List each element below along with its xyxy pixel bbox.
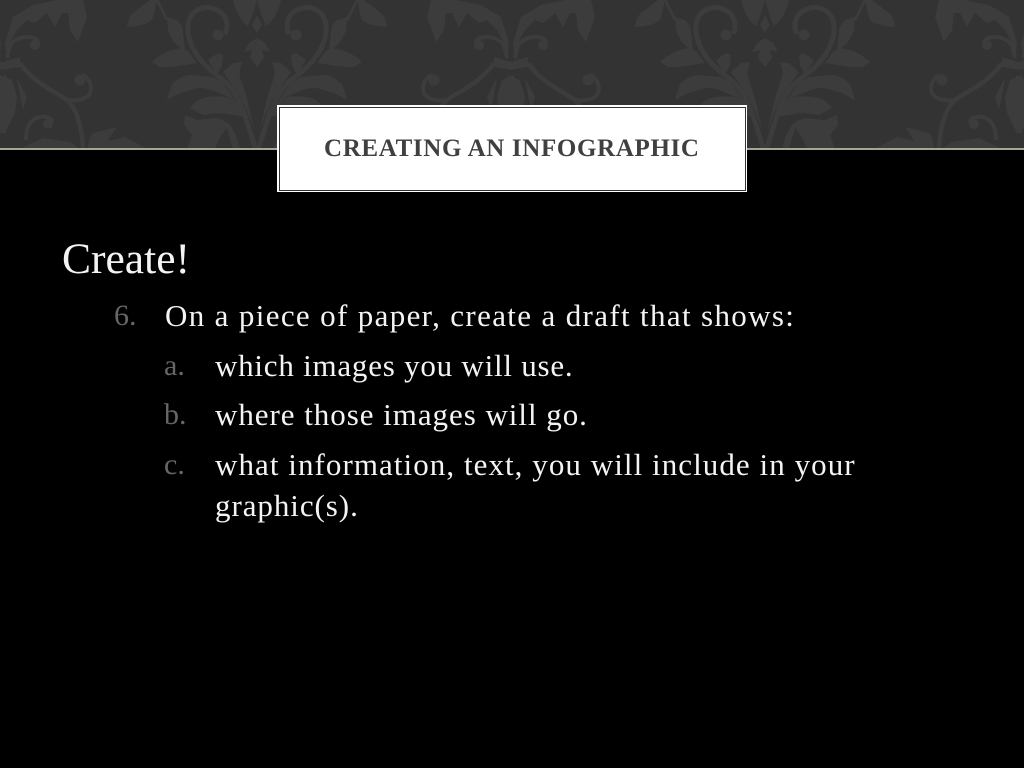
item b letter: b.	[164, 398, 186, 431]
item a letter: a.	[164, 349, 185, 382]
item a	[164, 348, 573, 383]
step text: On a piece of paper, create a draft that shows:	[165, 298, 795, 333]
header rule	[0, 148, 1024, 150]
item c text	[215, 447, 856, 523]
item c text: what information, text, you will include in your	[215, 447, 856, 482]
item b text: where those images will go.	[215, 397, 588, 432]
item a text: which images you will use.	[215, 348, 573, 383]
title box	[277, 105, 747, 192]
step number: 6.	[114, 299, 136, 332]
heading: Create!: Create!	[62, 235, 190, 283]
step 6	[114, 298, 795, 333]
item c letter: c.	[164, 448, 185, 481]
header band: damask pattern	[0, 0, 1024, 148]
item c text: graphic(s).	[215, 488, 359, 523]
title: CREATING AN INFOGRAPHIC	[324, 135, 700, 162]
item b	[164, 397, 588, 432]
item c	[164, 447, 856, 523]
